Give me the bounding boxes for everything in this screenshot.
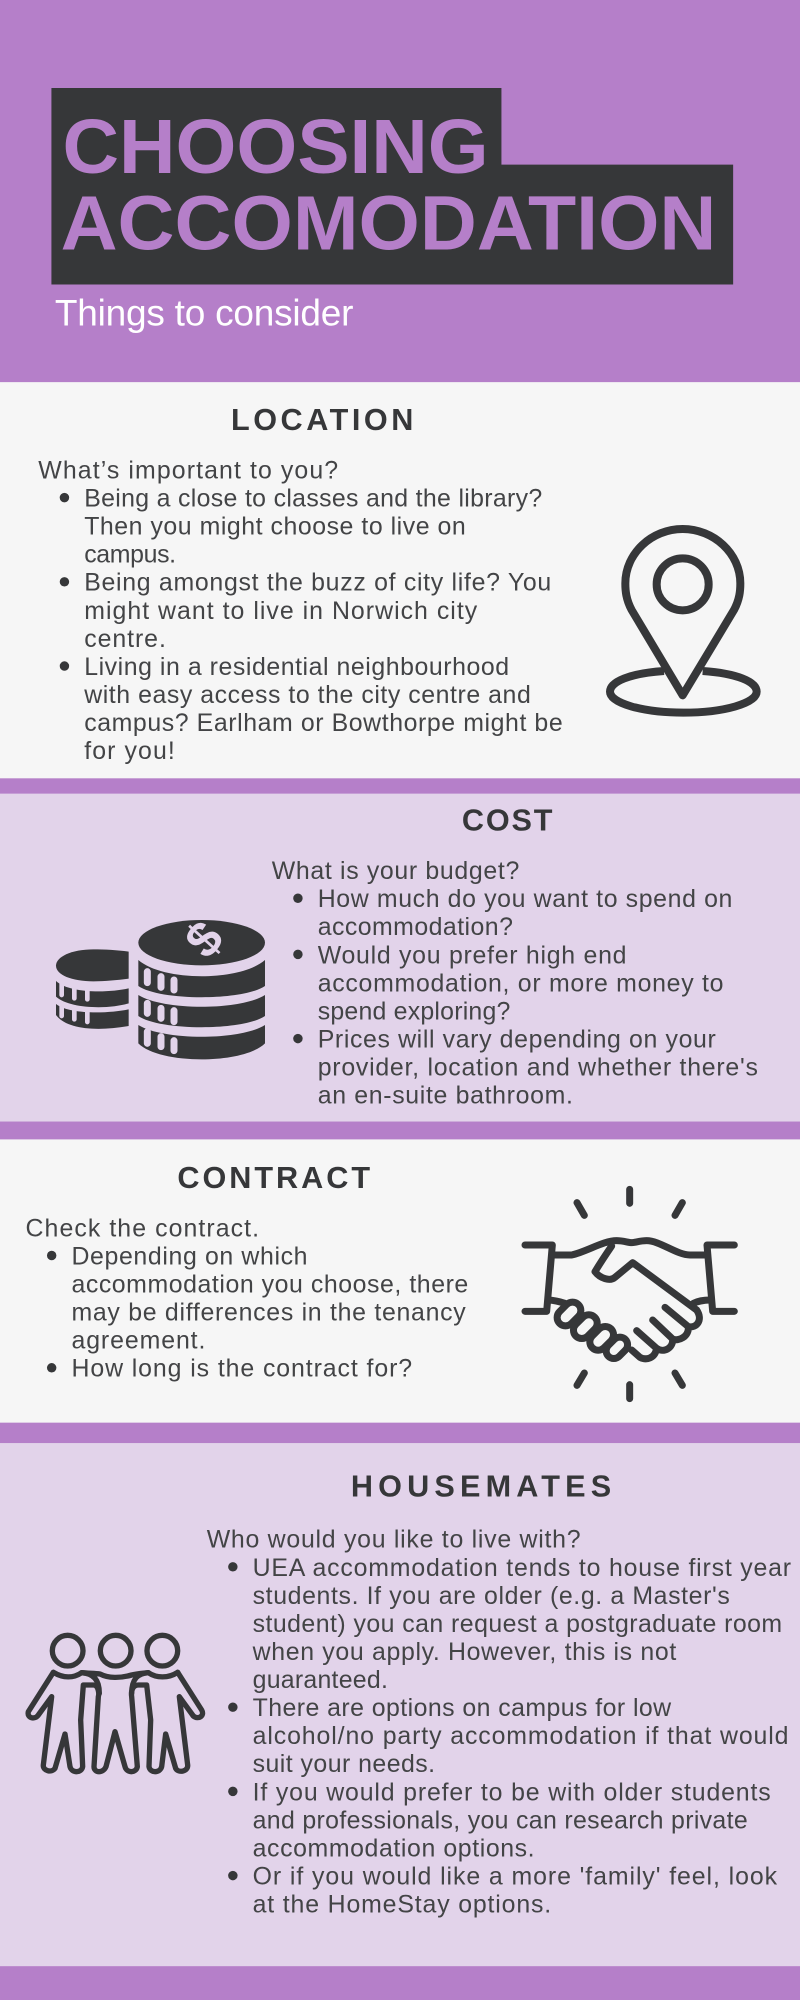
text block: housemates: when you apply. However, this is not bbox=[252, 1638, 676, 1666]
text block: contract bbox=[26, 1214, 468, 1383]
text block: housemates: suit your needs. bbox=[253, 1750, 435, 1778]
text block: housemates: UEA accommodation tends to house first year bbox=[253, 1554, 791, 1582]
panel: cost bbox=[0, 794, 800, 1122]
text block: cost bbox=[272, 857, 758, 1110]
text block: housemates: accommodation options. bbox=[253, 1834, 535, 1862]
text block: cost: How much do you want to spend on bbox=[318, 885, 732, 913]
text block: housemates: There are options on campus for low bbox=[253, 1694, 672, 1722]
icon: three people bbox=[28, 1635, 203, 1772]
icon: map pin bbox=[610, 529, 757, 713]
heading: location: LOCATION bbox=[231, 403, 413, 437]
text block: housemates: student) you can request a postgraduate room bbox=[253, 1610, 782, 1638]
text block: housemates: If you would prefer to be with older students bbox=[253, 1778, 771, 1806]
text block: housemates: Who would you like to live with? bbox=[207, 1526, 581, 1554]
text block: location: Then you might choose to live on bbox=[84, 513, 466, 541]
text block: cost: provider, location and whether there's bbox=[318, 1054, 758, 1082]
text block: location: centre. bbox=[84, 625, 166, 653]
text block: location: campus. bbox=[84, 541, 176, 569]
text block: housemates: students. If you are older (e.g. a Master's bbox=[253, 1582, 730, 1610]
text block: location: Being a close to classes and the library? bbox=[84, 485, 542, 513]
text block: cost: an en-suite bathroom. bbox=[318, 1082, 573, 1110]
text block: housemates: Or if you would like a more 'family' feel, look bbox=[253, 1863, 778, 1891]
title block: ACCOMODATION bbox=[61, 181, 716, 266]
text block: cost: spend exploring? bbox=[318, 997, 510, 1025]
text block: housemates: at the HomeStay options. bbox=[253, 1891, 551, 1919]
text block: location: campus? Earlham or Bowthorpe might be bbox=[84, 709, 563, 737]
title block: CHOOSING bbox=[63, 105, 489, 190]
icon: coin stacks bbox=[56, 910, 265, 1059]
text block: housemates: alcohol/no party accommodation if that would bbox=[253, 1722, 789, 1750]
heading: cost: COST bbox=[462, 804, 553, 838]
text block: contract: may be differences in the tenancy bbox=[71, 1299, 466, 1327]
heading: contract: CONTRACT bbox=[177, 1161, 370, 1195]
text block: housemates: guaranteed. bbox=[253, 1666, 388, 1694]
panel: location bbox=[0, 382, 800, 778]
text block: location: What’s important to you? bbox=[38, 456, 338, 484]
text block: cost: Would you prefer high end bbox=[318, 941, 626, 969]
panel: housemates bbox=[0, 1443, 800, 1966]
text block: contract: agreement. bbox=[71, 1327, 205, 1355]
text block: cost: What is your budget? bbox=[272, 857, 519, 885]
text block: cost: Prices will vary depending on your bbox=[318, 1026, 716, 1054]
text block: location: for you! bbox=[84, 737, 175, 765]
text block: housemates: and professionals, you can research private bbox=[253, 1806, 748, 1834]
text block: location: might want to live in Norwich city bbox=[84, 597, 478, 625]
text block: contract: Check the contract. bbox=[26, 1214, 259, 1242]
title block bbox=[51, 88, 733, 285]
icon: coin stacks: $ bbox=[174, 910, 234, 968]
text block: location: Living in a residential neighbourhood bbox=[84, 653, 509, 681]
panel: contract bbox=[0, 1139, 800, 1423]
heading: housemates: HOUSEMATES bbox=[351, 1470, 611, 1504]
text block: location bbox=[38, 456, 563, 765]
text block: location: with easy access to the city centre and bbox=[83, 681, 531, 709]
text block: cost: accommodation? bbox=[318, 913, 513, 941]
text block: housemates bbox=[207, 1526, 791, 1919]
text block: cost: accommodation, or more money to bbox=[318, 969, 723, 997]
text block: contract: How long is the contract for? bbox=[71, 1355, 412, 1383]
header panel bbox=[51, 88, 733, 333]
icon: handshake bbox=[525, 1189, 734, 1399]
text block: contract: Depending on which bbox=[71, 1242, 307, 1270]
subtitle: Things to consider bbox=[55, 292, 353, 333]
text block: contract: accommodation you choose, there bbox=[71, 1271, 468, 1299]
text block: location: Being amongst the buzz of city life? You bbox=[84, 569, 551, 597]
